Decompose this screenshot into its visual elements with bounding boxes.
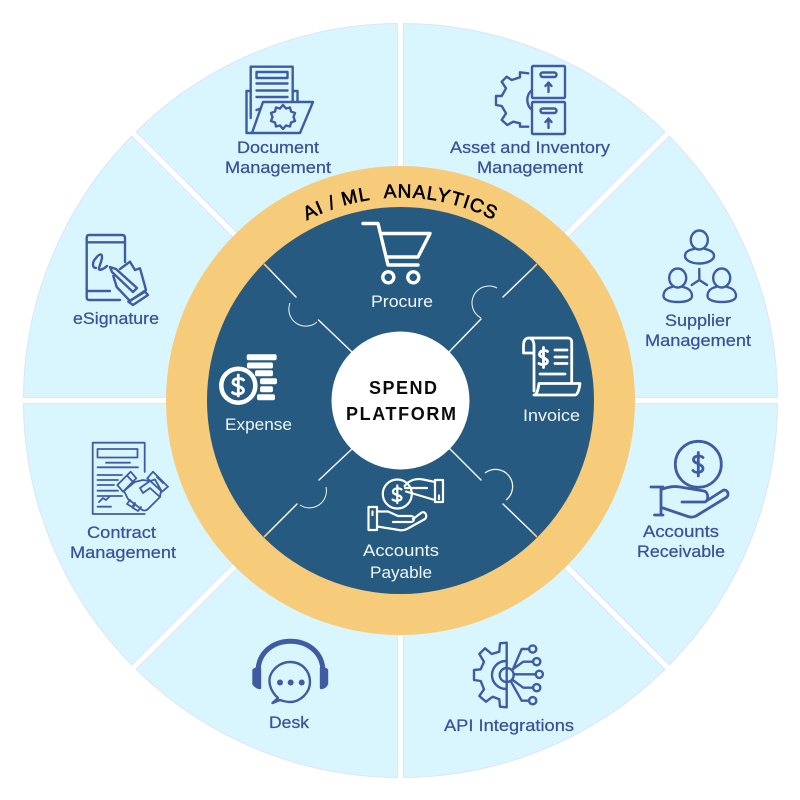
label [645, 311, 751, 350]
segment [408, 136, 778, 397]
hub: Spend Platform [332, 332, 470, 470]
label: Accounts [643, 522, 719, 541]
icon: shopping cart [363, 224, 430, 283]
label: Desk [269, 713, 310, 732]
icon: hand holding coin [651, 441, 728, 517]
label: eSignature [73, 309, 159, 328]
seam lines [264, 264, 537, 537]
icon: invoice scroll [524, 338, 580, 395]
hub circle [332, 332, 470, 470]
label: Supplier [665, 311, 731, 330]
label: Management [225, 158, 331, 177]
label: Procure [371, 292, 433, 311]
icon: supplier network [664, 230, 736, 302]
hub title [346, 378, 456, 424]
blue disc [207, 207, 594, 594]
panel: Desk [136, 408, 397, 778]
segment [136, 408, 397, 778]
icon: contract and handshake [93, 443, 168, 514]
piece: Accounts Payable [363, 479, 443, 582]
label [70, 523, 176, 562]
label [363, 541, 439, 582]
ring heading: AI / ML ANALYTICS [306, 184, 497, 221]
panel: Asset and Inventory Management [404, 24, 665, 393]
icon: coin and stack [221, 354, 277, 403]
label: Contract [87, 523, 156, 542]
segment [404, 24, 665, 393]
panel: eSignature [24, 136, 393, 397]
puzzle disc [207, 207, 594, 594]
panel: Accounts Receivable [408, 404, 778, 665]
label: Management [645, 331, 751, 350]
panel: Document Management [136, 24, 397, 393]
hub title: SPEND [369, 378, 437, 398]
hub title: PLATFORM [346, 404, 456, 424]
label [637, 522, 725, 561]
label: Receivable [637, 542, 725, 561]
icon: gear and boxes [496, 66, 565, 134]
label: Invoice [523, 406, 580, 425]
piece: Procure [363, 224, 433, 311]
label: API Integrations [444, 716, 574, 735]
piece: Expense [221, 354, 292, 434]
panel: Contract Management [24, 404, 393, 665]
icon: hands exchanging coin [368, 479, 443, 530]
icon: document folder with gear [246, 67, 313, 133]
piece: Invoice [523, 338, 580, 425]
segment [408, 404, 778, 665]
label: Asset and Inventory [450, 138, 611, 157]
panel: Supplier Management [408, 136, 778, 397]
icon: half gear with circuit nodes [474, 643, 543, 707]
icon: headset with chat bubble [254, 641, 327, 703]
label: Document [237, 138, 319, 157]
gold ring [166, 166, 635, 635]
label [225, 138, 331, 177]
segment [24, 136, 393, 397]
segment [404, 408, 665, 778]
label: Management [477, 158, 583, 177]
label: Accounts [363, 541, 439, 560]
label: Payable [370, 563, 432, 582]
label: Management [70, 543, 176, 562]
label [450, 138, 611, 177]
label: Expense [225, 415, 292, 434]
panel: API Integrations [404, 408, 665, 778]
icon: phone and signing hand [87, 235, 148, 305]
segment [136, 24, 397, 393]
segment [24, 404, 393, 665]
